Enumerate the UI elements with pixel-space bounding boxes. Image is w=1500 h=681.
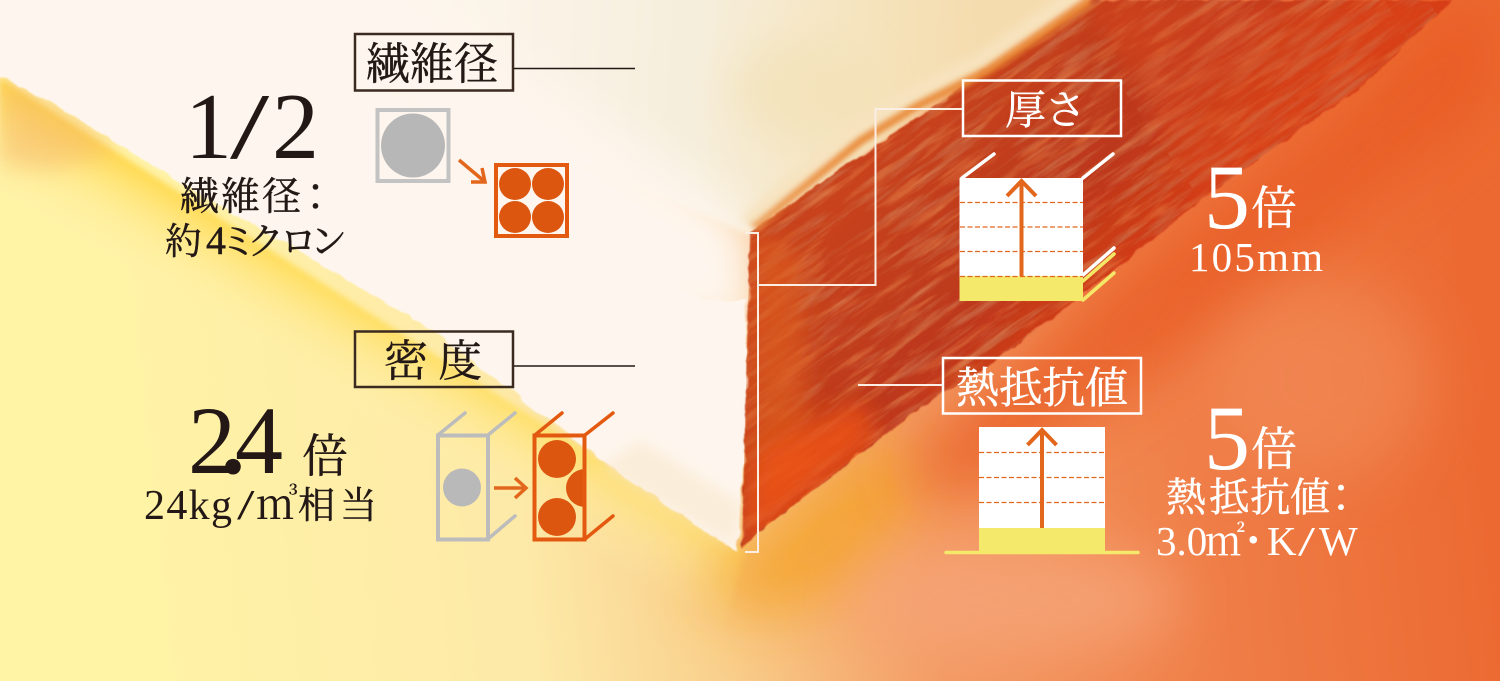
leader line: fibre diameter xyxy=(514,68,635,70)
caption: thermal resistance: 熱抵抗値： xyxy=(1166,475,1361,520)
caption: fibre diameter: ロ xyxy=(280,222,317,263)
stat: 2.4 times: 倍 xyxy=(302,431,348,482)
caption: fibre diameter xyxy=(165,176,347,263)
caption: thermal resistance: 3.0 xyxy=(1156,518,1207,564)
stat: 2.4 times xyxy=(188,387,348,494)
stat: one half xyxy=(185,74,319,179)
stat: thickness five times: 倍 xyxy=(1251,183,1297,234)
caption: density: / xyxy=(237,481,255,528)
label: density xyxy=(355,332,513,387)
icon: high density cube xyxy=(534,413,613,540)
stat: thermal resistance five times: 倍 xyxy=(1251,424,1297,475)
caption: fibre diameter: 4 xyxy=(206,218,226,263)
caption: thermal resistance xyxy=(1156,475,1361,564)
stat: 2.4 times: 2 xyxy=(188,387,236,494)
icon: thermal resistance block xyxy=(946,427,1138,553)
insulation: front face xyxy=(0,0,760,552)
icon: low density cube xyxy=(438,413,515,540)
caption: fibre diameter: 約 xyxy=(165,222,202,263)
caption: fibre diameter: ミ xyxy=(220,222,257,263)
caption: fibre diameter: ン xyxy=(310,222,347,263)
arrow: fibre xyxy=(459,160,485,182)
caption: thermal resistance: ㎡ xyxy=(1205,519,1245,564)
caption: thermal resistance: K xyxy=(1267,518,1297,564)
stat: 2.4 times: . xyxy=(221,387,245,494)
caption: density: 24kg xyxy=(144,483,232,529)
label: density: 密度 xyxy=(384,337,482,386)
insulation: side face xyxy=(740,0,1452,550)
caption: density: 相当 xyxy=(298,485,377,527)
stat: thickness five times xyxy=(1204,146,1297,248)
insulation: top face xyxy=(150,0,1095,236)
leader line: density xyxy=(514,365,635,367)
stat: thermal resistance five times: 5 xyxy=(1204,387,1250,489)
caption: thermal resistance: / xyxy=(1298,519,1316,564)
label: thickness xyxy=(963,80,1121,136)
label: thickness: 厚さ xyxy=(1005,87,1086,133)
stat: thickness five times: 5 xyxy=(1204,146,1250,248)
caption: thermal resistance: ･ xyxy=(1243,518,1264,564)
stat: thermal resistance five times xyxy=(1204,387,1297,489)
caption: density xyxy=(144,481,377,529)
arrow: density xyxy=(494,478,526,498)
caption: fibre diameter: ク xyxy=(247,222,284,263)
label: fibre diameter: 繊維径 xyxy=(366,40,498,89)
caption: thermal resistance: W xyxy=(1319,518,1358,564)
caption: fibre diameter: 繊維径： xyxy=(180,176,335,219)
stat: 2.4 times: 4 xyxy=(235,387,283,494)
leader line: thermal resistance xyxy=(858,384,942,386)
label: thermal resistance: 熱抵抗値 xyxy=(956,366,1128,413)
icon: thin fibres xyxy=(496,165,567,236)
stat: one half: 1 xyxy=(185,75,232,179)
icon: thickness block xyxy=(960,154,1114,301)
icon: thick fibre xyxy=(378,110,448,181)
caption: thickness: 105mm xyxy=(1189,234,1323,280)
stat: one half: / xyxy=(230,74,270,178)
bracket connector: thickness xyxy=(745,109,962,552)
stat: one half: 2 xyxy=(272,75,319,179)
caption: density: ㎥ xyxy=(256,483,298,529)
